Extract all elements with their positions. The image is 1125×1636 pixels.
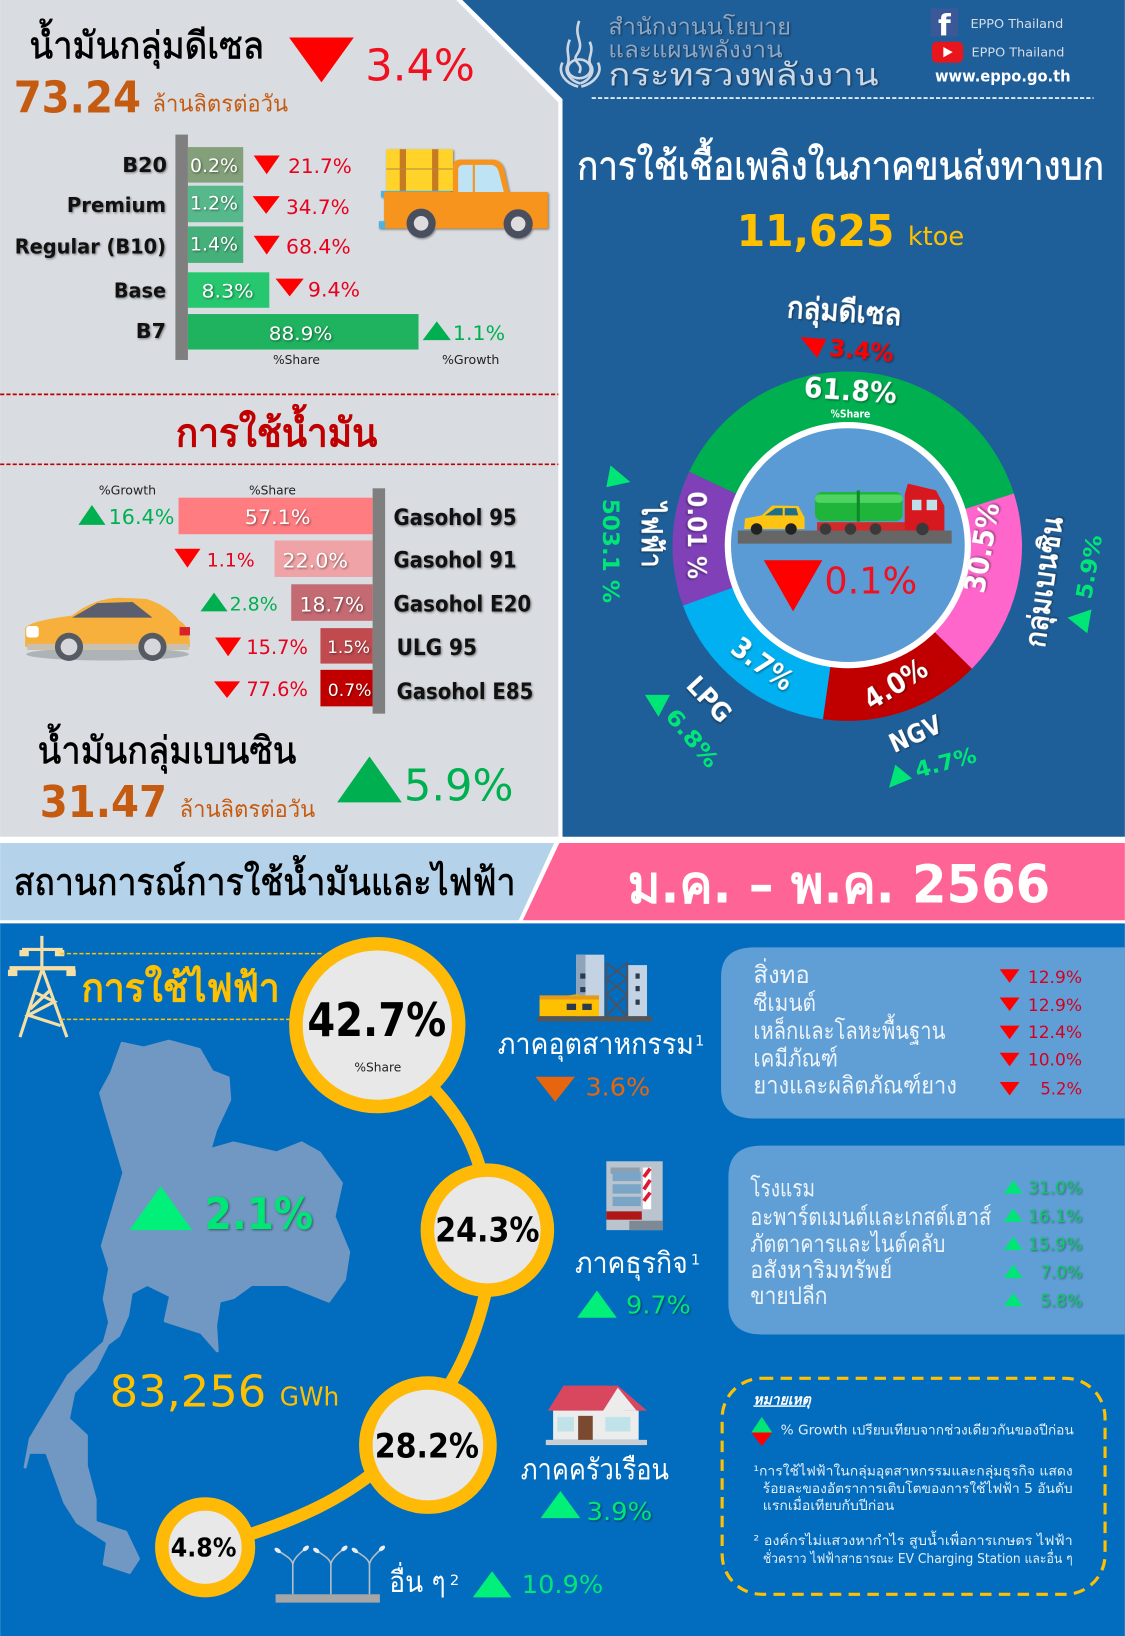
- header: social links: EPPO Thailand: [970, 16, 1063, 31]
- label: electricity: [597, 465, 668, 603]
- heading: gasoline group: 5.9%: [404, 760, 513, 811]
- donut chart: fuel share: 4.0%: [858, 652, 934, 716]
- bar chart: gasoline share and growth: 2.8%: [230, 594, 278, 615]
- label: other sector: อื่น ๆ: [389, 1562, 446, 1599]
- bar chart: gasoline share and growth: [78, 483, 533, 714]
- panel: industry breakdown: [721, 947, 1125, 1118]
- bar chart: gasoline share and growth: ULG 95: [397, 636, 477, 661]
- callout: notes: % Growth เปรียบเทียบจากช่วงเดียวกันของปีก่อน: [781, 1423, 1074, 1439]
- label: industry sector: [498, 1027, 704, 1102]
- donut chart: fuel share: 30.5%: [959, 500, 1007, 595]
- banner: period: [523, 843, 1125, 920]
- bar chart: diesel share and growth: %Growth: [442, 352, 499, 367]
- panel: business breakdown: 31.0%: [1028, 1179, 1082, 1198]
- bar chart: diesel share and growth: 88.9%: [269, 324, 332, 345]
- heading: electricity usage: การใช้ไฟฟ้า: [82, 965, 280, 1012]
- label: other sector: 10.9%: [522, 1570, 603, 1599]
- heading: oil usage: การใช้น้ำมัน: [176, 404, 377, 457]
- circle: industry share: [296, 944, 459, 1106]
- bar chart: diesel share and growth: Base: [114, 278, 166, 302]
- bar chart: diesel share and growth: 0.2%: [190, 156, 238, 177]
- header: ministry logo and name: [561, 13, 879, 94]
- label: industry sector: 3.6%: [585, 1073, 650, 1102]
- bar chart: diesel share and growth: [15, 135, 505, 367]
- bar chart: gasoline share and growth: 77.6%: [246, 678, 308, 701]
- panel: industry breakdown: 10.0%: [1028, 1050, 1082, 1069]
- circle: industry share: 42.7%: [307, 993, 446, 1047]
- donut chart: fuel share: 0.01 %: [681, 491, 711, 579]
- heading: gasoline group: น้ำมันกลุ่มเบนซิน: [38, 724, 296, 774]
- label: NGV: 4.7%: [912, 743, 979, 784]
- bar chart: gasoline share and growth: Gasohol E20: [393, 592, 531, 617]
- bar chart: gasoline share and growth: 16.4%: [109, 505, 174, 529]
- header: social links: www.eppo.go.th: [935, 66, 1071, 85]
- bar chart: diesel share and growth: 1.1%: [453, 322, 505, 345]
- label: business sector: [575, 1246, 700, 1320]
- icon: pickup truck: [379, 149, 548, 238]
- panel: industry breakdown: ยางและผลิตภัณฑ์ยาง: [753, 1071, 957, 1099]
- heading: diesel group: [14, 18, 475, 124]
- header: ministry logo and name: กระทรวงพลังงาน: [608, 58, 879, 94]
- label: LPG: [645, 671, 737, 773]
- panel: industry breakdown: 12.9%: [1028, 996, 1082, 1015]
- panel: business breakdown: โรงแรม: [750, 1175, 815, 1203]
- bar chart: gasoline share and growth: 57.1%: [245, 506, 311, 529]
- panel: business breakdown: 15.9%: [1028, 1235, 1082, 1254]
- panel: business breakdown: 5.8%: [1040, 1291, 1082, 1310]
- heading: diesel group: 3.4%: [365, 40, 475, 91]
- donut chart: fuel share: 61.8%: [803, 371, 898, 411]
- panel: industry breakdown: เหล็กและโลหะพื้นฐาน: [753, 1013, 945, 1045]
- heading: gasoline group: [38, 724, 513, 828]
- circle: other share: [162, 1504, 248, 1591]
- banner: title: [0, 843, 554, 920]
- icon: yellow car: [25, 598, 190, 661]
- icon: car and tanker truck on road: [738, 484, 952, 544]
- bar chart: diesel share and growth: 9.4%: [308, 278, 360, 301]
- label: household sector: 3.9%: [586, 1497, 652, 1526]
- heading: diesel group: น้ำมันกลุ่มดีเซล: [29, 18, 264, 68]
- label: LPG: 6.8%: [660, 704, 723, 773]
- panel: industry breakdown: 12.4%: [1028, 1023, 1082, 1042]
- stat: electricity total: [110, 1186, 339, 1417]
- label: household sector: ภาคครัวเรือน: [521, 1452, 669, 1486]
- label: gasoline group: กลุ่มเบนซิน: [1018, 514, 1071, 650]
- heading: diesel group: 73.24: [14, 73, 141, 124]
- icon: street lamps: [273, 1544, 386, 1603]
- label: industry sector: ภาคอุตสาหกรรม: [498, 1027, 694, 1062]
- panel: business breakdown: 16.1%: [1028, 1207, 1082, 1226]
- heading: gasoline group: 31.47: [40, 777, 167, 828]
- label: NGV: NGV: [885, 710, 947, 759]
- panel: industry breakdown: 12.9%: [1028, 968, 1082, 987]
- label: gasoline group: [1018, 514, 1108, 650]
- stat: electricity total: GWh: [280, 1382, 339, 1412]
- circle: business share: [427, 1170, 547, 1290]
- header: social links: [592, 8, 1094, 98]
- label: diesel group: [786, 290, 903, 367]
- bar chart: diesel share and growth: %Share: [273, 352, 320, 367]
- header: ministry logo and name: สำนักงานนโยบาย: [608, 13, 791, 40]
- bar chart: gasoline share and growth: 15.7%: [246, 636, 308, 659]
- bar chart: diesel share and growth: 8.3%: [201, 281, 254, 302]
- callout: notes: หมายเหตุ: [753, 1391, 812, 1409]
- label: other sector: 2: [450, 1572, 459, 1589]
- bar chart: diesel share and growth: 34.7%: [286, 196, 350, 219]
- circle: household share: 28.2%: [375, 1427, 479, 1466]
- panel: business breakdown: อะพาร์ตเมนต์และเกสต์เฮาส์: [750, 1203, 992, 1231]
- bar chart: gasoline share and growth: 1.1%: [207, 551, 255, 572]
- bar chart: diesel share and growth: 68.4%: [286, 236, 351, 259]
- panel: business breakdown: 7.0%: [1040, 1263, 1082, 1282]
- label: business sector: ภาคธุรกิจ: [575, 1246, 688, 1281]
- label: diesel group: 3.4%: [828, 334, 895, 367]
- label: gasoline group: 5.9%: [1072, 533, 1108, 601]
- heading: gasoline group: ล้านลิตรต่อวัน: [180, 797, 316, 823]
- callout: notes: ¹การใช้ไฟฟ้าในกลุ่มอุตสาหกรรมและกลุ่มธุรกิจ แสดง: [753, 1462, 1073, 1479]
- bar chart: gasoline share and growth: 0.7%: [328, 681, 372, 700]
- panel: oil usage background: [0, 0, 558, 837]
- heading: land transport fuel use: ktoe: [908, 222, 964, 252]
- panel: land transport fuel background: [462, 0, 1125, 837]
- panel: business breakdown: ขายปลีก: [750, 1282, 828, 1310]
- panel: industry breakdown: เคมีภัณฑ์: [753, 1044, 838, 1072]
- heading: diesel group: ล้านลิตรต่อวัน: [152, 92, 288, 118]
- panel: business breakdown: [728, 1146, 1125, 1334]
- bar chart: diesel share and growth: 21.7%: [288, 155, 352, 178]
- callout: notes: ² องค์กรไม่แสวงหากำไร สูบน้ำเพื่อการเกษตร ไฟฟ้า: [753, 1530, 1073, 1549]
- icon: house: [546, 1386, 647, 1445]
- donut chart: fuel share: %Share: [831, 408, 870, 420]
- heading: land transport fuel use: 11,625: [737, 206, 894, 257]
- circle: other share: 4.8%: [171, 1534, 236, 1564]
- panel: industry breakdown: สิ่งทอ: [753, 958, 810, 989]
- label: diesel group: กลุ่มดีเซล: [786, 290, 903, 334]
- circle: business share: 24.3%: [435, 1211, 540, 1250]
- bar chart: gasoline share and growth: Gasohol 95: [393, 506, 517, 531]
- callout: notes: แรกเมื่อเทียบกับปีก่อน: [763, 1496, 894, 1514]
- banner: period: ม.ค. – พ.ค. 2566: [628, 856, 1050, 916]
- header: ministry logo and name: และแผนพลังงาน: [608, 37, 783, 63]
- callout: notes: ชั่วคราว ไฟฟ้าสาธารณะ EV Charging Station และอื่น ๆ: [763, 1549, 1073, 1567]
- map: Thailand: [25, 1041, 349, 1572]
- panel: industry breakdown: 5.2%: [1040, 1079, 1082, 1098]
- panel: business breakdown: อสังหาริมทรัพย์: [750, 1256, 892, 1284]
- label: other sector: [389, 1562, 603, 1599]
- connector: sector circles: [248, 1083, 485, 1535]
- stat: electricity total: 2.1%: [205, 1189, 313, 1240]
- circle: industry share: %Share: [354, 1060, 402, 1075]
- icon: factory: [537, 955, 652, 1021]
- header: social links: EPPO Thailand: [971, 44, 1064, 59]
- bar chart: diesel share and growth: B7: [136, 319, 166, 343]
- callout: notes: ร้อยละของอัตราการเติบโตของการใช้ไฟฟ้า 5 อันดับ: [763, 1480, 1073, 1497]
- label: electricity: 503.1 %: [597, 499, 622, 603]
- stat: electricity total: 83,256: [110, 1366, 266, 1417]
- icon: power pylon: [10, 936, 75, 1037]
- bar chart: diesel share and growth: 1.2%: [190, 194, 238, 215]
- banner: title: สถานการณ์การใช้น้ำมันและไฟฟ้า: [14, 855, 516, 904]
- panel: business breakdown: ภัตตาคารและไนต์คลับ: [750, 1230, 945, 1258]
- bar chart: gasoline share and growth: 18.7%: [300, 593, 364, 616]
- label: business sector: 9.7%: [626, 1291, 691, 1320]
- circle: household share: [366, 1383, 490, 1507]
- stat: overall change: [764, 560, 917, 611]
- bar chart: diesel share and growth: 1.4%: [190, 234, 238, 255]
- label: industry sector: 1: [695, 1032, 704, 1049]
- label: business sector: 1: [691, 1252, 700, 1269]
- bar chart: gasoline share and growth: 22.0%: [282, 550, 348, 573]
- bar chart: gasoline share and growth: 1.5%: [327, 638, 370, 657]
- heading: land transport fuel use: [577, 137, 1104, 257]
- label: electricity: ไฟฟ้า: [635, 500, 668, 568]
- bar chart: diesel share and growth: Premium: [67, 193, 166, 217]
- bar chart: gasoline share and growth: Gasohol 91: [393, 549, 517, 574]
- icon: commercial building: [606, 1161, 663, 1230]
- label: LPG: LPG: [680, 671, 737, 729]
- callout: notes: [722, 1378, 1105, 1594]
- label: household sector: [521, 1452, 669, 1526]
- donut chart: fuel share: 3.7%: [725, 631, 800, 698]
- donut chart: fuel share: [673, 371, 1022, 721]
- header: social links: f: [938, 8, 951, 42]
- bar chart: gasoline share and growth: %Growth: [99, 483, 156, 498]
- bar chart: gasoline share and growth: %Share: [249, 483, 296, 498]
- bar chart: gasoline share and growth: Gasohol E85: [397, 680, 533, 705]
- bar chart: diesel share and growth: Regular (B10): [15, 235, 166, 259]
- bar chart: diesel share and growth: B20: [122, 153, 167, 177]
- panel: industry breakdown: ซีเมนต์: [753, 989, 816, 1017]
- label: NGV: [885, 710, 979, 788]
- stat: overall change: 0.1%: [824, 560, 917, 603]
- panel: electricity background: [0, 923, 1125, 1636]
